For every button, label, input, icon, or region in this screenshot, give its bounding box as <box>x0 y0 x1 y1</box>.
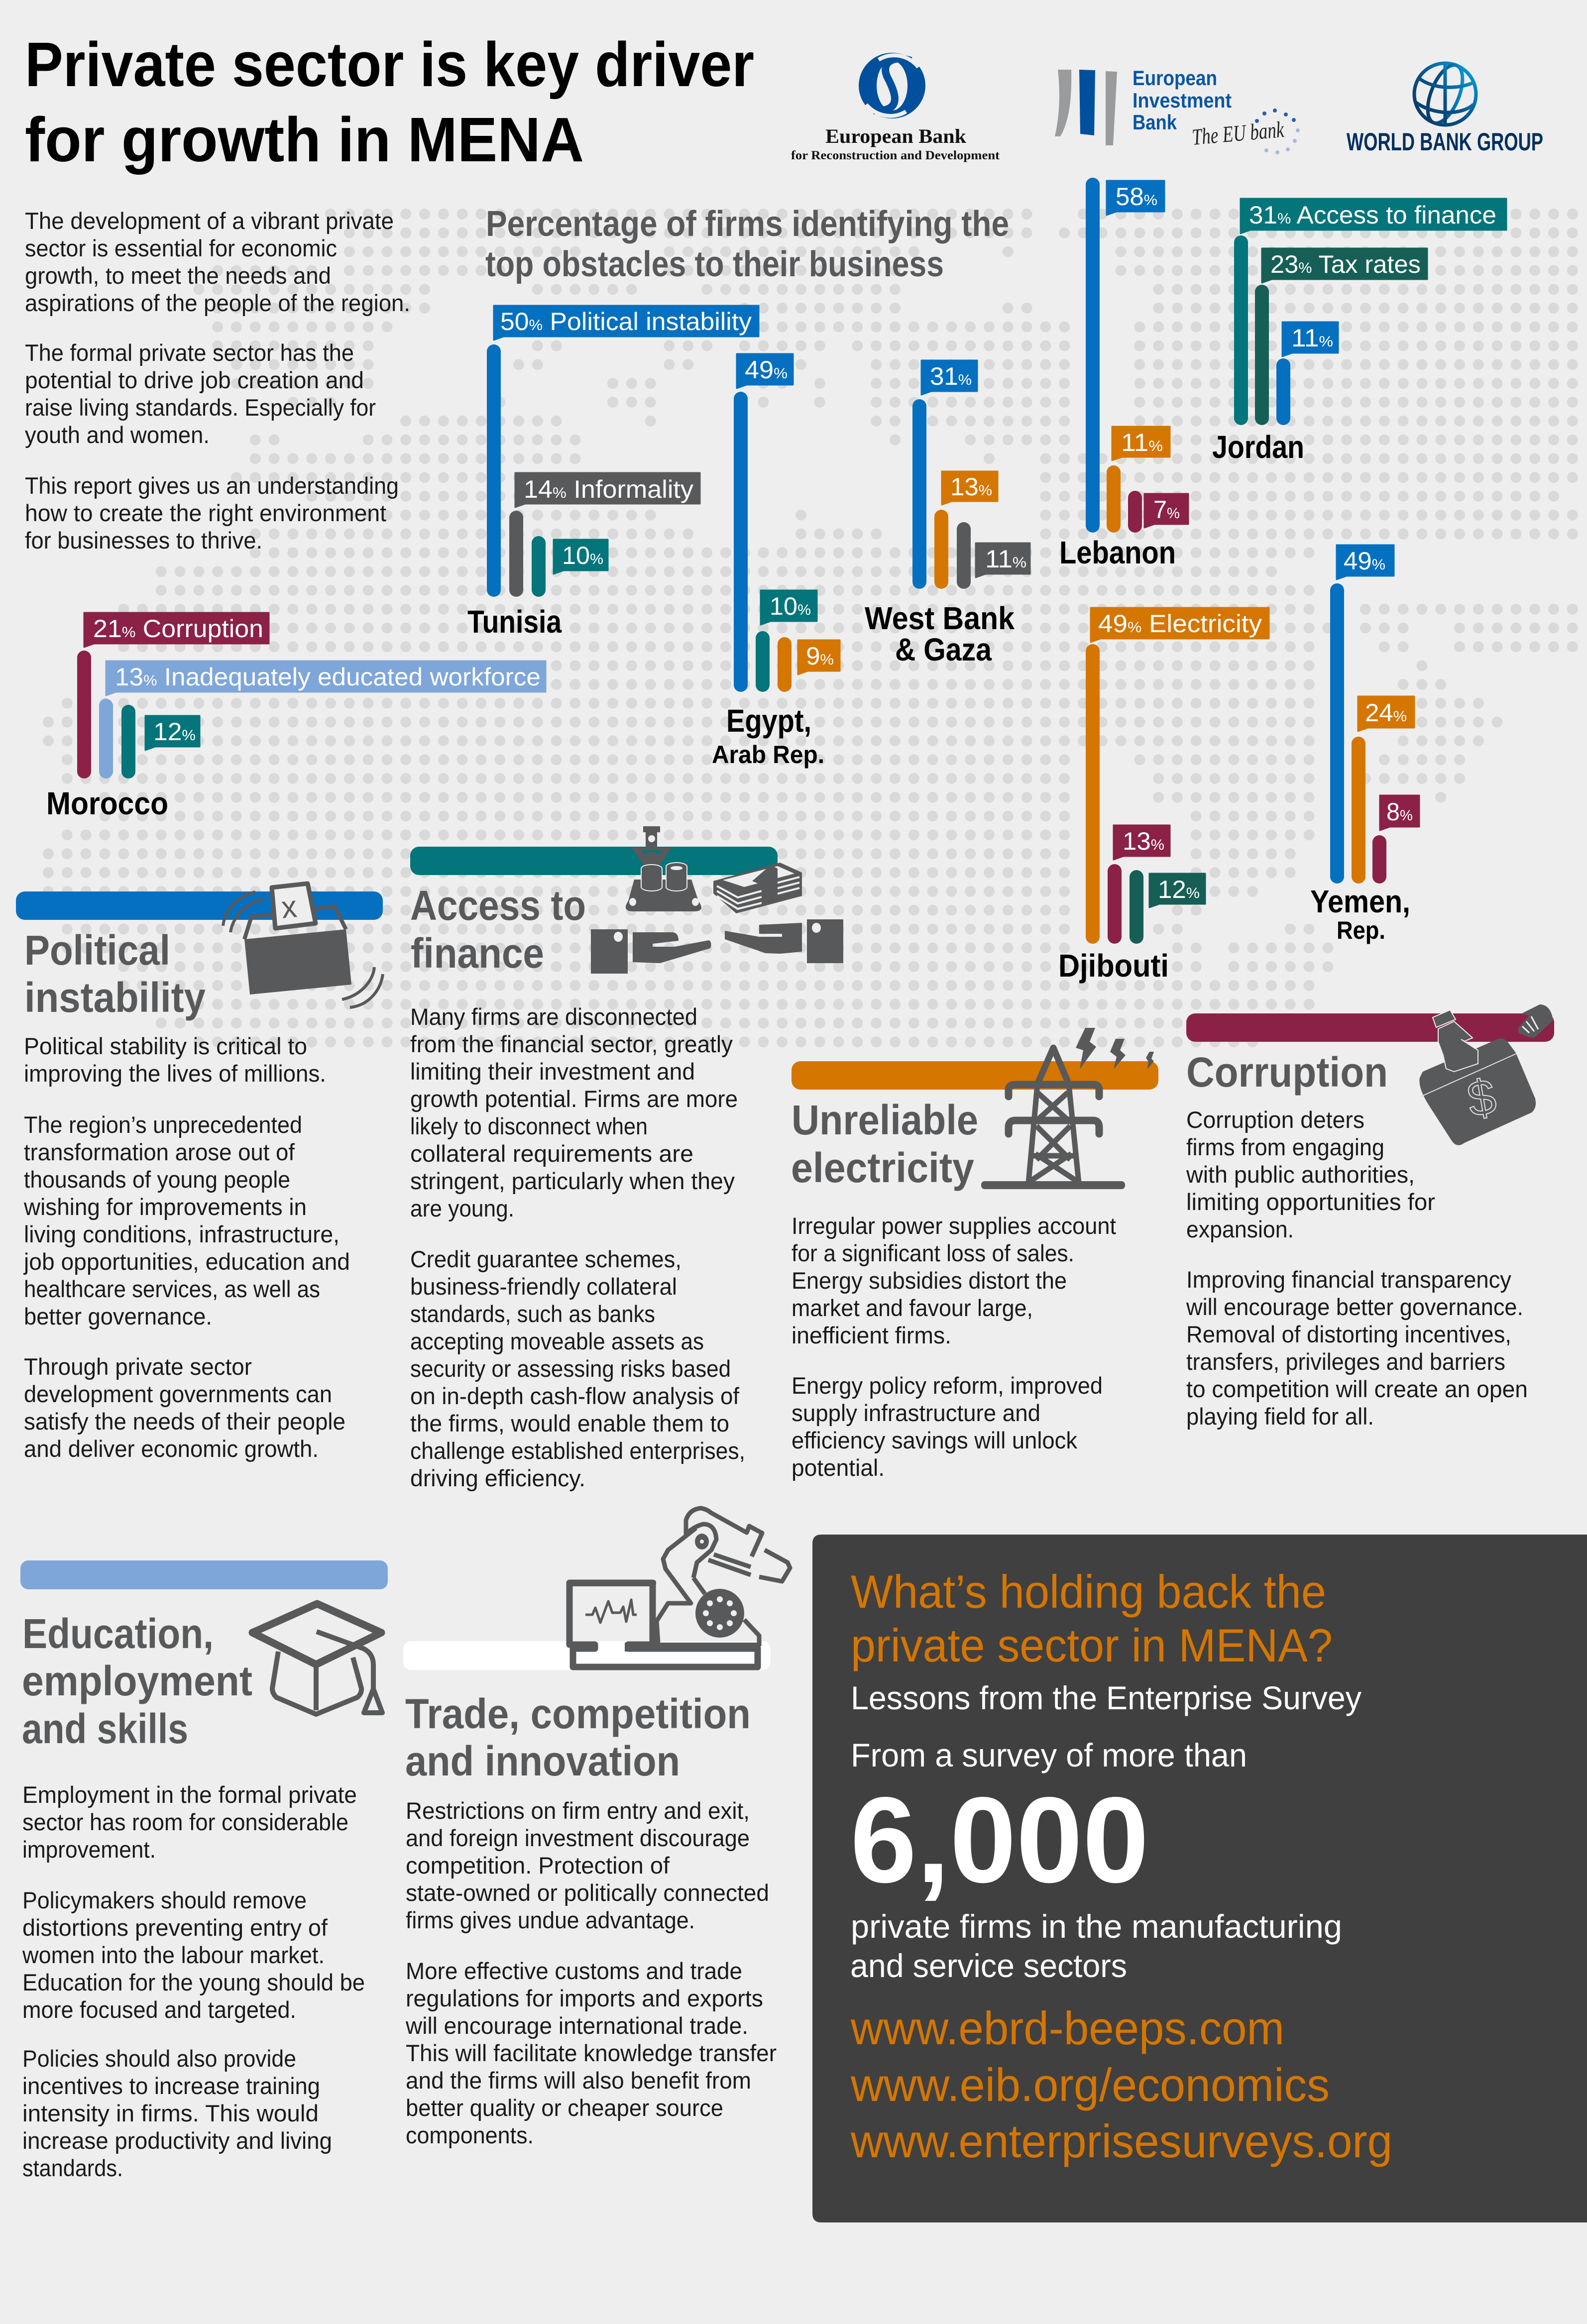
logo: European Investment Bank: Bank <box>1133 111 1177 134</box>
chart heading: Percentage of firms identifying the <box>486 204 1009 244</box>
logo: European Bank for Reconstruction and Development: for Reconstruction and Development <box>791 149 1000 162</box>
text: corruption: Corruption deters <box>1186 1107 1364 1133</box>
chart: Yemen <box>1310 545 1419 944</box>
chart: West Bank and Gaza: 11% <box>985 545 1026 573</box>
text: unreliable electricity: efficiency savings will unlock <box>792 1427 1077 1453</box>
intro text: raise living standards. Especially for <box>25 394 376 421</box>
text: unreliable electricity: Energy subsidies distort the <box>792 1267 1067 1294</box>
text: political instability: Through private sector <box>24 1353 252 1380</box>
heading: private sector in MENA? <box>851 1619 1333 1671</box>
chart: Tunisia <box>467 306 759 640</box>
logo: European Investment Bank: European <box>1133 66 1217 90</box>
panel: education, employment and skills: Education, <box>22 1610 214 1657</box>
text: trade, competition and innovation: regulations for imports and exports <box>406 1985 763 2011</box>
text: unreliable electricity: for a significant loss of sales. <box>792 1240 1074 1266</box>
chart: Jordan <box>1212 199 1506 465</box>
text: political instability: improving the lives of millions. <box>24 1060 326 1087</box>
text: access to finance: likely to disconnect when <box>410 1113 648 1139</box>
text: unreliable electricity: market and favour large, <box>792 1295 1033 1321</box>
title: for growth in MENA <box>25 105 584 175</box>
chart: Djibouti: 12% <box>1158 876 1200 903</box>
intro text: how to create the right environment <box>25 500 386 526</box>
text: corruption <box>1186 1107 1528 1430</box>
text: education, employment and skills: increase productivity and living <box>22 2127 332 2154</box>
text: access to finance: limiting their investment and <box>410 1058 695 1085</box>
text: political instability: wishing for improvements in <box>23 1194 307 1220</box>
text: education, employment and skills <box>22 1781 365 2181</box>
intro text: aspirations of the people of the region. <box>25 290 410 316</box>
text: education, employment and skills: improvement. <box>22 1836 156 1863</box>
chart: Yemen: 24% <box>1365 699 1407 727</box>
title: Private sector is key driver <box>25 29 754 100</box>
text: corruption: will encourage better governance. <box>1186 1294 1523 1320</box>
chart: Yemen: 8% <box>1386 798 1413 826</box>
chart: Morocco: 12% <box>153 718 196 746</box>
text: political instability: better governance. <box>24 1303 212 1329</box>
chart: Morocco: Morocco <box>46 785 168 821</box>
text: access to finance: on in-depth cash-flow analysis of <box>410 1383 740 1409</box>
text: access to finance: are young. <box>410 1195 514 1221</box>
text: corruption: limiting opportunities for <box>1186 1189 1435 1215</box>
icon: pylon with lightning <box>981 1028 1154 1189</box>
icon: ballot box: x <box>280 889 298 925</box>
links: www.enterprisesurveys.org <box>850 2115 1392 2167</box>
icon: ballot box <box>223 884 383 1007</box>
text: trade, competition and innovation: This will facilitate knowledge transfer <box>406 2040 777 2066</box>
text: education, employment and skills: Policies should also provide <box>22 2045 296 2072</box>
text: corruption: Improving financial transparency <box>1186 1266 1511 1293</box>
chart: Egypt <box>712 354 840 769</box>
text: access to finance: stringent, particularly when they <box>410 1168 735 1194</box>
panel: education, employment and skills <box>20 1560 388 2181</box>
text: political instability <box>23 1033 350 1462</box>
panel: what's holding back the private sector: Lessons from the Enterprise Survey <box>851 1679 1361 1716</box>
text: education, employment and skills: sector has room for considerable <box>22 1809 348 1835</box>
text: education, employment and skills: intensity in firms. This would <box>22 2100 319 2126</box>
panel: corruption: Corruption <box>1186 1049 1388 1096</box>
intro text: growth, to meet the needs and <box>25 262 331 289</box>
text: education, employment and skills: Education for the young should be <box>22 1969 365 1995</box>
text: access to finance: from the financial sector, greatly <box>410 1031 733 1057</box>
text: unreliable electricity: supply infrastructure and <box>792 1400 1040 1426</box>
text: access to finance: security or assessing risks based <box>410 1355 731 1382</box>
text: corruption: playing field for all. <box>1186 1403 1374 1430</box>
chart: Tunisia: 10% <box>562 542 603 569</box>
chart heading: top obstacles to their business <box>485 244 944 284</box>
text: education, employment and skills: Policymakers should remove <box>22 1887 307 1913</box>
text: education, employment and skills: standards. <box>22 2155 123 2181</box>
text: trade, competition and innovation: will encourage international trade. <box>405 2012 748 2039</box>
text: education, employment and skills: Employment in the formal private <box>22 1781 357 1808</box>
text: trade, competition and innovation: better quality or cheaper source <box>406 2095 723 2121</box>
chart: Tunisia: 14% Informality <box>524 475 693 503</box>
text: political instability: development governments can <box>24 1381 332 1407</box>
chart: Morocco <box>46 613 546 821</box>
icon: mortarboard <box>252 1604 382 1714</box>
text: political instability: job opportunities, education and <box>23 1248 350 1275</box>
intro text <box>25 208 410 553</box>
chart: Yemen: Yemen, <box>1310 884 1410 919</box>
intro text: This report gives us an understanding <box>25 472 399 499</box>
chart: Jordan: 31% Access to finance <box>1249 201 1496 229</box>
text: access to finance: growth potential. Firms are more <box>410 1086 738 1112</box>
text: access to finance: Many firms are disconnected <box>410 1003 697 1030</box>
panel: access to finance: finance <box>411 930 544 977</box>
panel: access to finance: Access to <box>410 882 586 929</box>
text: access to finance <box>410 1003 745 1491</box>
chart: Djibouti: 49% Electricity <box>1098 610 1262 638</box>
chart: Egypt: 10% <box>770 592 811 620</box>
logo: European Investment Bank: The EU bank <box>1191 116 1285 150</box>
links: www.eib.org/economics <box>850 2059 1330 2111</box>
panel: political instability: Political <box>24 927 170 974</box>
panel: trade, competition and innovation: and innovation <box>405 1738 680 1784</box>
chart: Morocco: 21% Corruption <box>93 615 263 643</box>
intro text: youth and women. <box>25 422 210 448</box>
chart: West Bank and Gaza: 31% <box>930 362 972 390</box>
chart: Lebanon: 11% <box>1121 429 1163 456</box>
chart: West Bank and Gaza: & Gaza <box>895 632 992 667</box>
icon: hands and bag of money: $ <box>1463 1068 1500 1128</box>
chart: Egypt: 49% <box>745 356 788 384</box>
text: political instability: healthcare services, as well as <box>24 1276 320 1302</box>
text: education, employment and skills: more focused and targeted. <box>22 1996 296 2023</box>
panel: what's holding back the private sector: and service sectors <box>850 1947 1127 1984</box>
text: unreliable electricity: potential. <box>792 1454 885 1481</box>
panel: trade, competition and innovation: Trade, competition <box>405 1690 751 1737</box>
text: unreliable electricity: inefficient firms. <box>792 1322 951 1348</box>
text: trade, competition and innovation: components. <box>406 2122 534 2148</box>
text: political instability: satisfy the needs of their people <box>24 1408 345 1435</box>
chart: Egypt: 9% <box>806 642 834 670</box>
text: unreliable electricity <box>792 1213 1116 1481</box>
chart: Egypt: Egypt, <box>726 703 811 739</box>
chart: Lebanon: Lebanon <box>1059 535 1176 570</box>
icon: hands and bag of money <box>1419 1004 1553 1145</box>
text: education, employment and skills: distortions preventing entry of <box>22 1914 328 1941</box>
panel: unreliable electricity: electricity <box>791 1144 974 1191</box>
chart: Djibouti: Djibouti <box>1058 948 1169 984</box>
panel: education, employment and skills: and skills <box>22 1705 188 1752</box>
text: access to finance: collateral requirements are <box>410 1140 693 1167</box>
text: access to finance: business-friendly collateral <box>410 1273 677 1300</box>
chart: Tunisia: Tunisia <box>467 604 562 640</box>
text: unreliable electricity: Energy policy reform, improved <box>792 1372 1103 1399</box>
text: access to finance: standards, such as banks <box>410 1301 655 1327</box>
text: corruption: transfers, privileges and barriers <box>1186 1348 1505 1375</box>
intro text: The formal private sector has the <box>25 339 354 366</box>
panel: what's holding back the private sector <box>812 1535 1587 2222</box>
panel: what's holding back the private sector: From a survey of more than <box>851 1737 1247 1773</box>
text: political instability: and deliver economic growth. <box>24 1436 319 1462</box>
title <box>25 29 754 175</box>
text: corruption: to competition will create an open <box>1186 1376 1528 1402</box>
chart: Tunisia: 50% Political instability <box>500 308 752 335</box>
text: trade, competition and innovation: and the firms will also benefit from <box>406 2067 751 2094</box>
text: access to finance: Credit guarantee schemes, <box>410 1246 681 1272</box>
heading <box>851 1565 1333 1671</box>
icon: monitor and robot arm <box>569 1508 790 1667</box>
logo: World Bank Group <box>1347 60 1543 156</box>
chart: West Bank and Gaza: West Bank <box>865 600 1015 636</box>
text: political instability: The region’s unprecedented <box>24 1111 302 1138</box>
text: corruption: with public authorities, <box>1186 1161 1415 1188</box>
text: education, employment and skills: incentives to increase training <box>22 2073 320 2099</box>
chart: West Bank and Gaza <box>865 360 1030 667</box>
text: corruption: firms from engaging <box>1186 1134 1384 1160</box>
chart: Morocco: 13% Inadequately educated workforce <box>115 663 541 691</box>
intro text: potential to drive job creation and <box>25 367 364 393</box>
panel: unreliable electricity <box>791 1028 1158 1481</box>
text: political instability: thousands of young people <box>24 1166 290 1193</box>
text: corruption: Removal of distorting incentives, <box>1186 1321 1511 1347</box>
panel: political instability: instability <box>24 974 206 1021</box>
panel: trade, competition and innovation <box>403 1508 790 2148</box>
text: corruption: expansion. <box>1186 1216 1294 1242</box>
text: political instability: living conditions, infrastructure, <box>24 1221 340 1247</box>
panel: access to finance <box>410 826 843 1491</box>
chart heading <box>485 204 1009 284</box>
links <box>850 2002 1392 2167</box>
panel: what's holding back the private sector: private firms in the manufacturing <box>851 1908 1342 1945</box>
logo: European Investment Bank <box>1055 66 1300 154</box>
text: trade, competition and innovation: More effective customs and trade <box>406 1958 742 1984</box>
icon: conveyor and money <box>591 826 843 974</box>
text: trade, competition and innovation: competition. Protection of <box>406 1852 670 1879</box>
chart: West Bank and Gaza: 13% <box>950 473 992 501</box>
text: access to finance: accepting moveable assets as <box>410 1328 704 1354</box>
intro text: The development of a vibrant private <box>25 208 394 234</box>
panel: education, employment and skills: employment <box>22 1658 252 1704</box>
logo: European Bank for Reconstruction and Development <box>791 53 1000 162</box>
text: trade, competition and innovation <box>405 1797 777 2148</box>
text: education, employment and skills: women into the labour market. <box>22 1942 325 1968</box>
text: trade, competition and innovation: firms gives undue advantage. <box>406 1907 695 1933</box>
text: trade, competition and innovation: Restrictions on firm entry and exit, <box>406 1797 750 1824</box>
intro text: sector is essential for economic <box>25 235 337 261</box>
text: trade, competition and innovation: and foreign investment discourage <box>406 1825 750 1851</box>
text: trade, competition and innovation: state-owned or politically connected <box>406 1880 769 1906</box>
panel: corruption <box>1186 1004 1554 1430</box>
chart: Lebanon <box>1059 178 1188 570</box>
logo: European Bank for Reconstruction and Development: European Bank <box>825 125 967 147</box>
logo: European Investment Bank: Investment <box>1133 89 1232 112</box>
big number: 6,000 <box>850 1771 1149 1908</box>
chart: Jordan: 11% <box>1291 324 1333 352</box>
chart: Lebanon: 58% <box>1116 183 1157 211</box>
chart: Yemen: 49% <box>1344 547 1385 575</box>
chart: Djibouti <box>1058 608 1269 984</box>
panel: political instability <box>16 884 383 1462</box>
chart: Yemen: Rep. <box>1337 916 1385 944</box>
chart: Djibouti: 13% <box>1123 827 1164 855</box>
text: access to finance: the firms, would enable them to <box>410 1410 729 1437</box>
links: www.ebrd-beeps.com <box>850 2002 1284 2054</box>
chart: Jordan: 23% Tax rates <box>1270 250 1421 278</box>
text: access to finance: driving efficiency. <box>410 1465 585 1491</box>
text: unreliable electricity: Irregular power supplies account <box>792 1213 1116 1239</box>
text: political instability: transformation arose out of <box>24 1139 295 1165</box>
text: political instability: Political stability is critical to <box>24 1033 307 1059</box>
text: access to finance: challenge established enterprises, <box>410 1438 745 1464</box>
intro text: for businesses to thrive. <box>25 527 262 553</box>
panel: unreliable electricity: Unreliable <box>792 1097 978 1143</box>
heading: What’s holding back the <box>851 1565 1326 1618</box>
chart: Jordan: Jordan <box>1212 429 1304 465</box>
chart: Lebanon: 7% <box>1153 496 1180 524</box>
chart: Egypt: Arab Rep. <box>712 741 824 769</box>
